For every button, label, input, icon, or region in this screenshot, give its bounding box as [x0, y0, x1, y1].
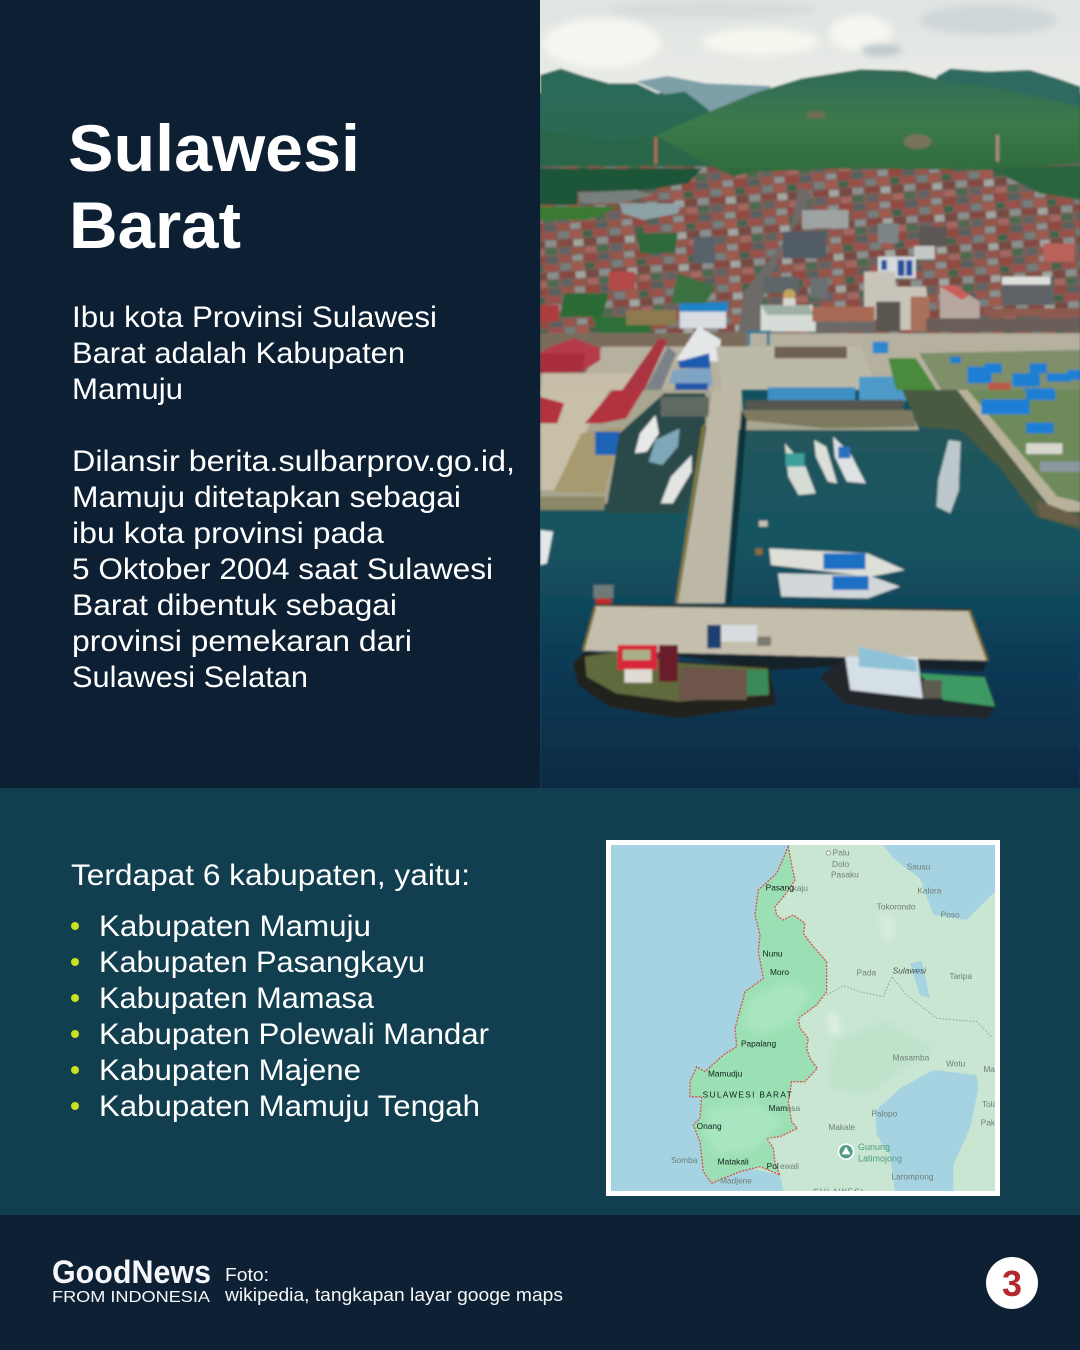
panel: footer background	[0, 1215, 1080, 1350]
panel: regencies background	[0, 788, 1080, 1215]
map: West Sulawesi: Madjene	[720, 1176, 752, 1186]
heading: Sulawesi Barat	[68, 111, 360, 262]
text block: history of Mamuju as capital: provinsi pemekaran dari	[72, 625, 412, 658]
map: West Sulawesi: Palu	[833, 848, 850, 858]
heading: Sulawesi Barat: Sulawesi	[68, 111, 360, 185]
list: six regencies: Kabupaten Mamuju	[99, 910, 371, 943]
text block: history of Mamuju as capital: Barat dibentuk sebagai	[72, 589, 397, 622]
text block: history of Mamuju as capital: Sulawesi Selatan	[72, 661, 308, 694]
text block: capital of the province	[72, 301, 437, 406]
map: West Sulawesi: Palopo	[871, 1109, 898, 1119]
list: six regencies: Kabupaten Mamuju Tengah	[99, 1090, 480, 1123]
map: West Sulawesi: Masamba	[893, 1053, 930, 1063]
text block: history of Mamuju as capital	[72, 445, 515, 694]
list: six regencies: Kabupaten Pasangkayu	[99, 946, 425, 979]
heading: Sulawesi Barat: Barat	[69, 188, 241, 262]
map: West Sulawesi: Somba	[671, 1155, 698, 1165]
text block: photo credit: Foto:	[225, 1265, 269, 1285]
map: West Sulawesi: Tola	[982, 1099, 998, 1109]
map: West Sulawesi: asa	[787, 1103, 800, 1113]
icon: mountain pin: Gunung	[858, 1142, 890, 1152]
logo: GoodNews from Indonesia: FROM INDONESIA	[52, 1289, 211, 1306]
map: West Sulawesi: Mam	[769, 1103, 787, 1113]
map: West Sulawesi: Nunu	[763, 948, 783, 958]
photo: aerial view of Mamuju harbour	[533, 0, 1080, 797]
text block: photo credit: wikipedia, tangkapan layar googe maps	[224, 1285, 563, 1305]
text block: capital of the province: Barat adalah Kabupaten	[72, 337, 405, 370]
map: West Sulawesi: Wotu	[946, 1058, 966, 1068]
text block: regencies intro: Terdapat 6 kabupaten, yaitu:	[71, 859, 470, 892]
map: West Sulawesi: Larompong	[891, 1172, 934, 1182]
map: West Sulawesi: Pol	[767, 1161, 779, 1171]
page number badge: 3	[1002, 1263, 1022, 1304]
map: West Sulawesi: Papalang	[741, 1038, 777, 1048]
text block: history of Mamuju as capital: Mamuju ditetapkan sebagai	[72, 481, 461, 514]
icon: mountain pin	[838, 1142, 902, 1163]
map: West Sulawesi: Pak	[981, 1117, 996, 1127]
map: West Sulawesi: Sausu	[907, 861, 931, 871]
map: West Sulawesi: Poso	[941, 909, 960, 919]
map: West Sulawesi: Pada	[857, 967, 876, 977]
map: West Sulawesi: Makale	[828, 1122, 856, 1132]
map: West Sulawesi: SULAWESI BARAT	[703, 1089, 793, 1099]
map: West Sulawesi: Pasang	[766, 883, 794, 893]
map: West Sulawesi: Mamudju	[708, 1069, 743, 1079]
map: West Sulawesi: Ma	[983, 1064, 995, 1074]
map: West Sulawesi: Dolo	[832, 859, 849, 869]
text block: history of Mamuju as capital: 5 Oktober 2004 saat Sulawesi	[72, 553, 493, 586]
text block: photo credit	[224, 1265, 563, 1305]
icon: mountain pin: Latimojong	[858, 1153, 902, 1163]
list: six regencies: Kabupaten Mamasa	[99, 982, 374, 1015]
map: West Sulawesi: Moro	[770, 967, 789, 977]
map: West Sulawesi	[606, 840, 1000, 1196]
text block: history of Mamuju as capital: Dilansir berita.sulbarprov.go.id,	[72, 445, 515, 478]
map: West Sulawesi: ewali	[780, 1161, 799, 1171]
text block: capital of the province: Ibu kota Provinsi Sulawesi	[72, 301, 437, 334]
panel: intro background	[0, 0, 540, 788]
map: West Sulawesi: Onang	[697, 1121, 722, 1131]
map: West Sulawesi: kaju	[793, 883, 808, 893]
map: West Sulawesi: SULAWESI	[813, 1186, 864, 1196]
logo: GoodNews from Indonesia	[52, 1254, 211, 1306]
map: West Sulawesi: Taripa	[949, 971, 972, 981]
text block: history of Mamuju as capital: ibu kota provinsi pada	[72, 517, 384, 550]
map: West Sulawesi: Matakali	[718, 1156, 749, 1166]
map: West Sulawesi: Sulawesi	[893, 965, 927, 975]
text block: capital of the province: Mamuju	[72, 373, 183, 406]
list: six regencies: Kabupaten Majene	[99, 1054, 361, 1087]
logo: GoodNews from Indonesia: GoodNews	[52, 1254, 211, 1290]
page number badge	[986, 1257, 1038, 1309]
list: six regencies	[71, 910, 489, 1123]
map: West Sulawesi: Kalora	[917, 885, 942, 895]
list: six regencies: Kabupaten Polewali Mandar	[99, 1018, 489, 1051]
map: West Sulawesi: Pasaku	[831, 869, 859, 879]
map: West Sulawesi: Tokorondo	[877, 902, 916, 912]
